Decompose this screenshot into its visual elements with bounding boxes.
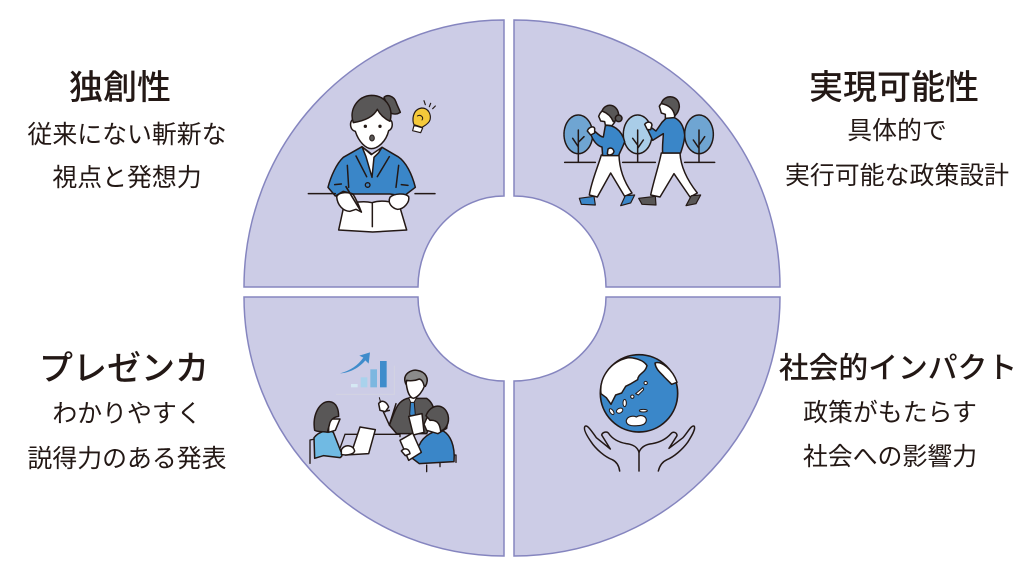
text block: 独創性: 視点と発想力	[52, 164, 202, 192]
text block: 社会的インパクト: 社会への影響力	[803, 443, 977, 471]
text block: 独創性	[27, 69, 227, 192]
text block: 社会的インパクト: 政策がもたらす	[803, 399, 977, 427]
text block: プレゼンカ: 説得力のある発表	[27, 445, 227, 473]
icon: business meeting with rising chart	[310, 352, 456, 472]
text block: 実現可能性: 実行可能な政策設計	[785, 162, 1009, 190]
panel: top-right quadrant	[514, 20, 780, 287]
panel: bottom-left quadrant	[244, 297, 504, 556]
icon: student writing with lightbulb	[308, 95, 435, 232]
text block: 独創性: 独創性	[69, 69, 171, 107]
panel: top-left quadrant	[244, 20, 504, 287]
icon: two people walking past trees	[564, 97, 715, 206]
text block: 実現可能性: 実現可能性	[809, 69, 979, 107]
icon: globe held in two hands	[584, 355, 695, 471]
text block: 実現可能性: 具体的で	[847, 117, 947, 145]
panel: bottom-right quadrant	[514, 297, 780, 556]
text block: 社会的インパクト: 社会的インパクト	[779, 352, 1017, 385]
text block: 実現可能性	[785, 69, 1009, 190]
text block: プレゼンカ	[27, 350, 227, 473]
text block: 独創性: 従来にない斬新な	[27, 121, 227, 149]
text block: プレゼンカ: プレゼンカ	[39, 350, 209, 388]
text block: 社会的インパクト	[779, 352, 1017, 471]
text block: プレゼンカ: わかりやすく	[52, 400, 202, 428]
